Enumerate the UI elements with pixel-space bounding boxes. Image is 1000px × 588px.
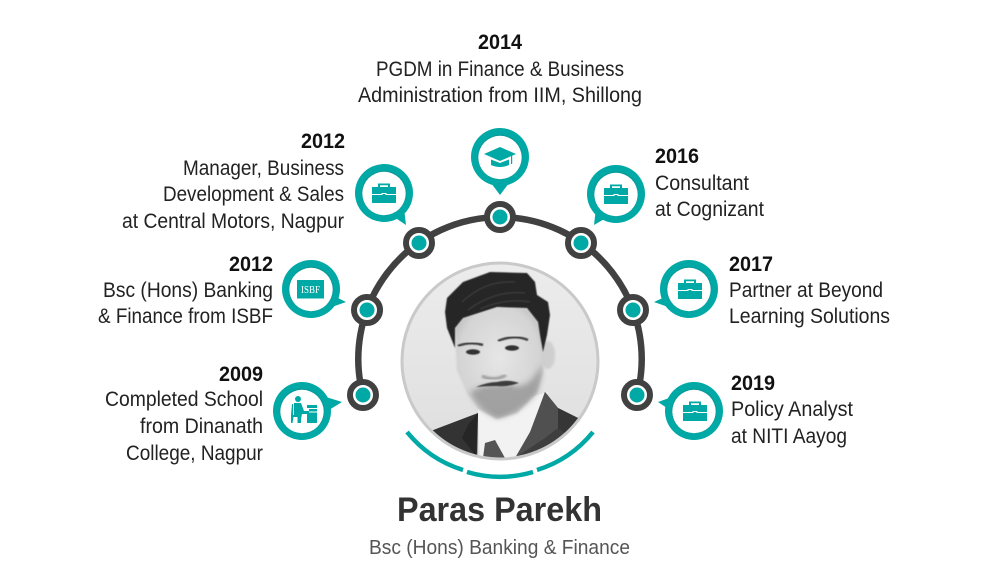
text: 2019 Policy Analyst: 2019 xyxy=(731,372,775,395)
suit left xyxy=(432,413,478,455)
text: 2012 Bsc: & Finance from ISBF xyxy=(98,305,273,328)
suit right xyxy=(517,392,578,456)
text: 2017 Partner: 2017 xyxy=(729,253,773,276)
eyes xyxy=(466,349,480,355)
text: 2012 Manager: Development & Sales xyxy=(163,183,344,206)
subtitle: Bsc (Hons) Banking & Finance xyxy=(369,537,630,559)
icon: ISBF bubble 2012: ISBF xyxy=(301,284,320,296)
shirt xyxy=(478,392,548,458)
text: 2009 School: Completed School xyxy=(105,388,263,411)
text: 2019 Policy Analyst: Policy Analyst xyxy=(731,398,853,421)
text: 2012 Manager: 2012 xyxy=(301,130,345,153)
text: 2017 Partner: Partner at Beyond xyxy=(729,279,883,302)
text: 2012 Bsc xyxy=(98,253,273,328)
icon: briefcase bubble 2016 xyxy=(587,165,645,225)
text: 2014 PGDM: PGDM in Finance & Business xyxy=(376,58,624,81)
text: 2012 Bsc: 2012 xyxy=(229,253,273,276)
name heading: Paras Parekh xyxy=(397,491,602,529)
ear xyxy=(543,341,556,369)
text: 2014 PGDM: 2014 xyxy=(478,31,522,54)
text: 2009 School: College, Nagpur xyxy=(126,442,263,465)
text: 2012 Bsc: Bsc (Hons) Banking xyxy=(103,279,273,302)
icon: graduation cap bubble 2014 xyxy=(471,128,529,195)
text: 2012 Manager: Manager, Business xyxy=(183,157,344,180)
eyebrows xyxy=(458,343,483,346)
text: 2014 PGDM: Administration from IIM, Shillong xyxy=(358,84,642,107)
text: 2016 Consultant xyxy=(655,145,764,221)
hair xyxy=(445,272,550,352)
nose shadow xyxy=(482,375,506,379)
text: 2016 Consultant: at Cognizant xyxy=(655,198,764,221)
text: 2012 Manager xyxy=(122,130,345,233)
text: 2017 Partner: Learning Solutions xyxy=(729,305,890,328)
icon: briefcase bubble 2019 xyxy=(658,382,723,440)
text: 2017 Partner xyxy=(729,253,890,328)
face xyxy=(455,307,543,419)
portrait photo xyxy=(402,263,598,470)
icon: briefcase bubble 2012 manager xyxy=(355,164,413,225)
tie xyxy=(483,440,505,458)
text: 2012 Manager: at Central Motors, Nagpur xyxy=(122,210,344,233)
teal arc under portrait xyxy=(407,432,593,477)
text: 2016 Consultant: Consultant xyxy=(655,172,749,195)
text: 2019 Policy Analyst: at NITI Aayog xyxy=(731,425,847,448)
text: 2009 School: 2009 xyxy=(219,363,263,386)
mouth xyxy=(482,387,514,397)
timeline nodes xyxy=(350,204,650,408)
text: 2009 School: from Dinanath xyxy=(140,415,263,438)
moustache xyxy=(476,381,519,387)
icon: student at desk bubble 2009 xyxy=(273,382,342,440)
icon: briefcase bubble 2017 xyxy=(654,260,718,318)
icon: ISBF bubble 2012 xyxy=(282,260,346,318)
text: 2016 Consultant: 2016 xyxy=(655,145,699,168)
text: 2019 Policy Analyst xyxy=(731,372,853,448)
beard xyxy=(470,365,542,418)
timeline arc xyxy=(358,217,642,395)
text: 2014 PGDM xyxy=(358,31,642,107)
text: 2009 School xyxy=(105,363,263,465)
